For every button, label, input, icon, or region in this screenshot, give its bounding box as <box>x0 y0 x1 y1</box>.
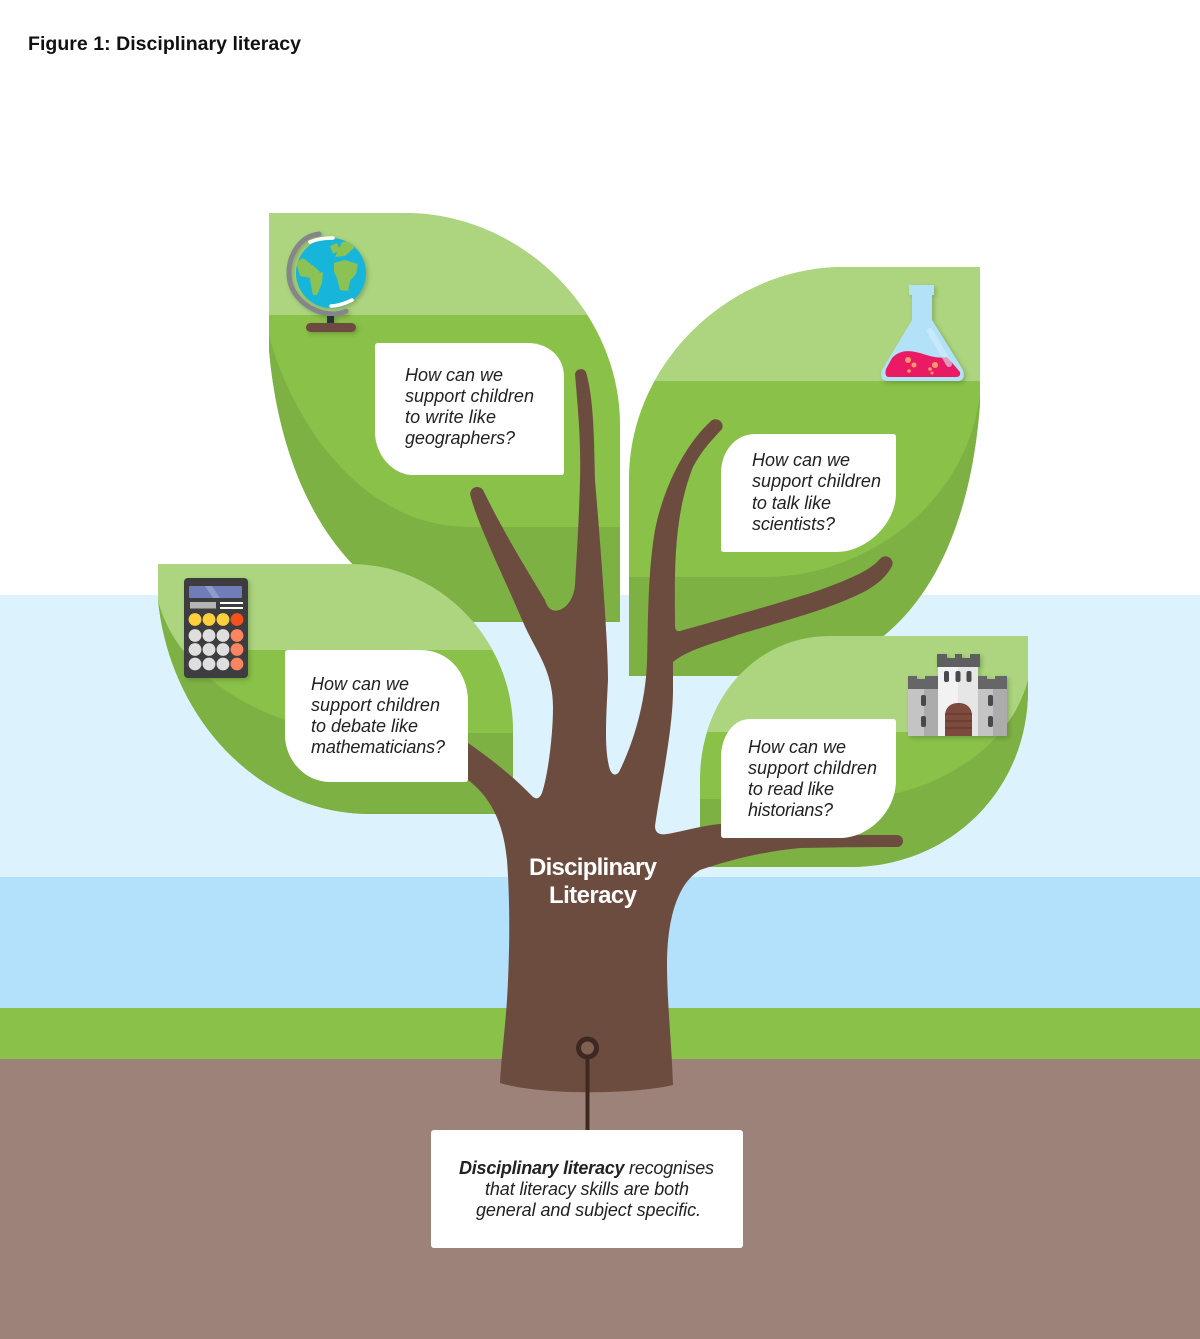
trunk label: Disciplinary <box>529 854 658 881</box>
card: geographers: to write like <box>405 407 496 427</box>
card: historians: support children <box>748 758 877 778</box>
trunk label <box>529 854 658 909</box>
leaf: middle left <box>158 564 513 814</box>
card: mathematicians: How can we <box>311 674 409 694</box>
definition box: that literacy skills are both <box>485 1179 689 1199</box>
icon: calculator <box>184 578 248 678</box>
card: scientists: How can we <box>752 450 850 470</box>
leaf: middle right <box>700 636 1028 867</box>
card: geographers: How can we <box>405 365 503 385</box>
card: scientists <box>721 434 896 552</box>
definition box <box>431 1130 743 1248</box>
title: Figure 1: Disciplinary literacy <box>28 33 301 55</box>
card: scientists: to talk like <box>752 493 831 513</box>
icon: globe <box>289 234 366 332</box>
icon: flask <box>881 285 964 381</box>
icon: castle <box>908 654 1007 736</box>
card: scientists: scientists? <box>752 514 835 534</box>
connector: ring and line to definition box <box>578 1039 596 1132</box>
card: historians <box>721 719 896 838</box>
definition box: Disciplinary literacy recognises <box>459 1158 714 1178</box>
leaf: top right <box>620 260 990 690</box>
tree trunk and branches <box>468 369 903 1092</box>
card: historians: to read like <box>748 779 834 799</box>
card: geographers <box>375 343 564 475</box>
card: historians: How can we <box>748 737 846 757</box>
card: mathematicians: mathematicians? <box>311 737 445 757</box>
definition box: general and subject specific. <box>476 1200 701 1220</box>
trunk label: Literacy <box>549 882 638 909</box>
card: mathematicians: to debate like <box>311 716 418 736</box>
card: geographers: support children <box>405 386 534 406</box>
card: mathematicians <box>285 650 468 782</box>
leaf: top left <box>269 213 620 622</box>
card: historians: historians? <box>748 800 833 820</box>
card: geographers: geographers? <box>405 428 515 448</box>
card: mathematicians: support children <box>311 695 440 715</box>
card: scientists: support children <box>752 471 881 491</box>
